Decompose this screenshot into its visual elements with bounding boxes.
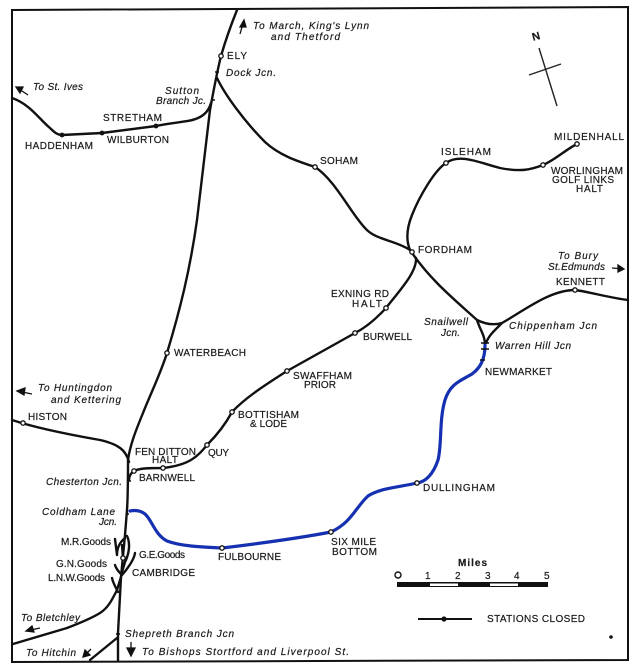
station labels: HADDENHAM [25,141,93,152]
scale bar: Miles [458,558,487,569]
station labels: SOHAM [320,156,358,167]
station labels: FULBOURNE [218,552,281,563]
station labels: WATERBEACH [174,348,246,359]
line: Newmarket to Cambridge (blue highlighted route) [130,345,485,548]
station labels: MILDENHALL [554,132,624,143]
junction and destination labels in italics: Branch Jc. [156,96,206,107]
junction ticks [116,72,489,634]
line: Kennett line and Snailwell triangle [477,290,628,345]
scale bar: 3 [485,571,491,582]
station labels: BARNWELL [139,473,195,484]
goods yard labels: G.E.Goods [139,550,185,561]
station labels [25,51,624,579]
station labels: SIX MILE [331,537,376,548]
station labels: HISTON [28,412,67,423]
junction and destination labels in italics: and Kettering [51,395,121,406]
station labels: WILBURTON [107,135,169,146]
closed stations on the Haddenham branch [60,124,158,137]
station labels: HALT [152,455,178,466]
goods yard labels: M.R.Goods [61,537,111,548]
junction and destination labels in italics: Chippenham Jcn [509,321,597,332]
junction and destination labels in italics: and Thetford [271,32,340,43]
goods yard labels: L.N.W.Goods [48,573,105,584]
junction and destination labels in italics: To Hitchin [26,648,76,659]
legend: stations closed [418,614,585,625]
scale bar: 5 [544,571,550,582]
station labels: GOLF LINKS [552,175,614,186]
junction and destination labels in italics: Dock Jcn. [226,68,276,79]
station labels: NEWMARKET [485,367,552,378]
scale bar: 1 [425,571,431,582]
scale bar: 2 [455,571,461,582]
scale bar: 4 [514,571,520,582]
station labels: WORLINGHAM [551,166,623,177]
line: Dock Junction to Fordham and Snailwell [217,78,477,320]
junction and destination labels in italics: To Bury [558,251,599,262]
line: Haddenham branch [12,98,211,135]
station labels: PRIOR [304,380,336,391]
line: Shepreth branch to Hitchin [90,638,117,660]
station labels: BURWELL [363,332,412,343]
scale bar [395,558,550,587]
station labels: FEN DITTON [135,447,196,458]
junction and destination labels in italics: To Huntingdon [38,383,112,394]
stray printed dot [609,635,613,639]
junction and destination labels in italics: Warren Hill Jcn [495,341,571,352]
station labels: HALT [352,299,382,310]
station labels: & LODE [250,419,287,430]
stations on the lines [21,54,579,560]
station labels: BOTTOM [332,547,377,558]
station labels: FORDHAM [418,245,472,256]
station labels: BOTTISHAM [238,410,299,421]
station labels: EXNING RD [331,289,389,300]
main line: Ely to Cambridge and south [118,10,237,661]
line: Histon branch [12,420,129,462]
station labels: SWAFFHAM [293,371,352,382]
junction and destination labels in italics: Sutton [165,86,199,97]
junction and destination labels in italics: Jcn. [440,328,460,339]
north compass: N [531,30,542,44]
junction and destination labels in italics: To Bishops Stortford and Liverpool St. [142,647,349,658]
goods yard labels: G.N.Goods [56,559,107,570]
station labels: DULLINGHAM [423,483,495,494]
station labels: STRETHAM [103,113,162,124]
Cambridge goods lines [13,536,135,644]
junction and destination labels in italics: Chesterton Jcn. [46,477,122,488]
junction and destination labels in italics: Coldham Lane [42,507,115,518]
junction and destination labels in italics: Snailwell [424,317,469,328]
station labels: ISLEHAM [441,147,491,158]
station labels: KENNETT [556,277,605,288]
station labels: ELY [227,51,247,62]
line: Fordham to Mildenhall [407,144,577,250]
station labels: QUY [208,448,229,459]
junction and destination labels in italics: To March, King's Lynn [253,21,369,32]
north compass [529,30,561,106]
junction and destination labels in italics: St.Edmunds [548,262,605,273]
station labels: HALT [576,184,603,195]
junction and destination labels in italics: To Bletchley [21,613,81,624]
legend: stations closed: STATIONS CLOSED [487,614,585,625]
junction and destination labels in italics: Jcn. [98,517,117,528]
junction and destination labels in italics: To St. Ives [33,82,83,93]
goods yard labels [48,537,185,584]
line: Fordham to Cambridge via Burwell [129,258,416,480]
station labels: CAMBRIDGE [132,568,195,579]
junction and destination labels in italics: Shepreth Branch Jcn [125,629,234,640]
